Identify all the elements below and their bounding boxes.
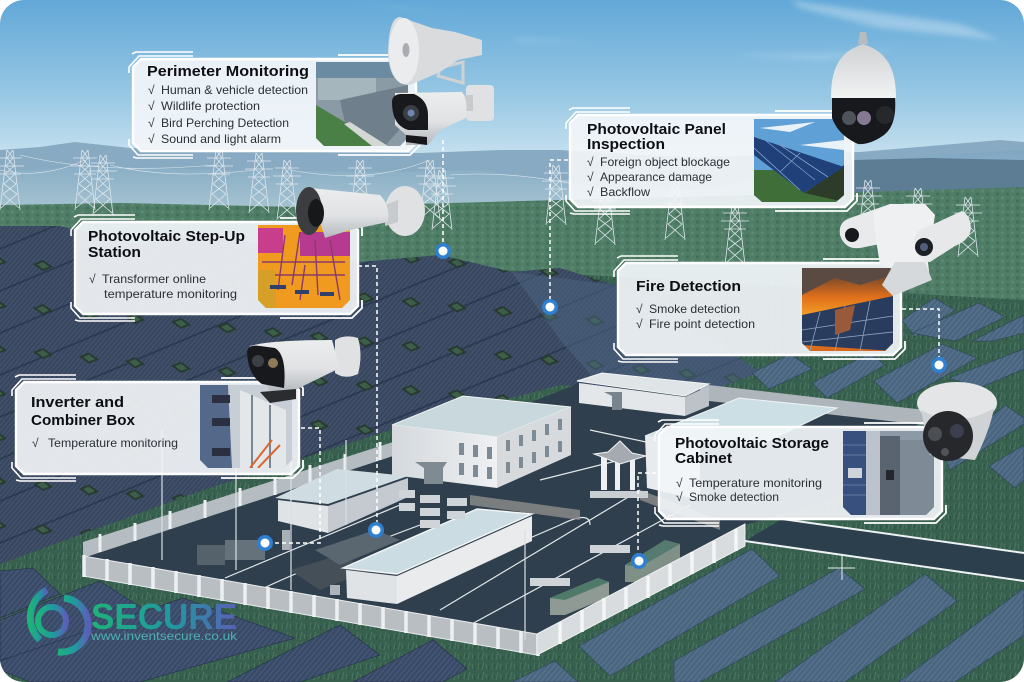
pavilion: [590, 441, 648, 498]
feature list: storage: √: [676, 490, 683, 504]
photo: inverter cabinets: [200, 385, 292, 468]
icon: horn speaker: [388, 17, 482, 85]
feature list: fire: √: [636, 317, 643, 331]
photo: burning solar panels: [802, 268, 893, 351]
sky: [0, 0, 1024, 153]
feature list: storage: Temperature monitoring: [689, 476, 822, 490]
feature list: perimeter: Bird Perching Detection: [161, 116, 289, 130]
heading: step-up station: Photovoltaic Step-Up: [88, 228, 245, 245]
front fence wall right: [537, 524, 745, 655]
front fence posts: [84, 555, 538, 656]
long building: [343, 509, 532, 604]
feature list: step-up: [89, 272, 237, 301]
feature list: panel inspection: Foreign object blockage: [600, 155, 730, 169]
panel: photovoltaic panel inspection: [566, 108, 857, 214]
panel: photovoltaic storage cabinet: [655, 420, 946, 526]
feature list: perimeter: √: [148, 116, 155, 130]
transformer equipment: [197, 530, 400, 595]
feature list: panel inspection: Backflow: [600, 185, 650, 199]
solar field left: [0, 226, 760, 564]
storage building: [645, 398, 837, 500]
fence inner: [470, 490, 720, 530]
substation compound: [83, 373, 925, 656]
solar panels right and bottom: [512, 298, 1024, 682]
battery containers: [550, 540, 680, 615]
heading: storage cabinet: [675, 435, 829, 467]
heading: storage cabinet: Photovoltaic Storage: [675, 435, 829, 452]
feature list: perimeter: √: [148, 99, 155, 113]
panel: perimeter monitoring: [129, 52, 420, 158]
step-up building: [275, 469, 408, 533]
panel: photovoltaic step-up station: [71, 215, 362, 321]
clouds: [518, 0, 995, 62]
feature list: panel inspection: √: [587, 155, 594, 169]
heading: fire detection: Fire Detection: [636, 278, 741, 295]
photo: thermal image: [258, 225, 350, 308]
feature list: inverter: √: [32, 436, 39, 450]
feature list: perimeter: Human & vehicle detection: [161, 83, 308, 97]
icon: bullet camera perimeter: [392, 85, 494, 145]
heading: panel inspection: Inspection: [587, 136, 665, 153]
road markings: [225, 430, 690, 625]
icon: dual PTZ camera: [840, 204, 971, 296]
connector: perimeter: [435, 140, 451, 259]
icon: inverter bullet camera: [247, 336, 360, 403]
logo mark: [30, 590, 88, 652]
asphalt ground: [83, 385, 925, 638]
feature list: panel inspection: [587, 155, 730, 199]
photo: plant aerial view: [316, 62, 408, 146]
heading: inverter: [31, 394, 136, 429]
power towers: [0, 150, 982, 265]
insulators: [399, 490, 630, 586]
heading: perimeter monitoring: Perimeter Monitoring: [147, 63, 309, 80]
feature list: storage: √: [676, 476, 683, 490]
feature list: step-up: Transformer online: [102, 272, 206, 286]
logo: secure: [30, 590, 238, 652]
back walls: [83, 442, 393, 558]
heading: inverter: Combiner Box: [31, 412, 136, 429]
heading: step-up station: [88, 228, 245, 261]
feature list: perimeter: √: [148, 132, 155, 146]
logo url: www.inventsecure.co.uk: [90, 629, 238, 643]
feature list: perimeter: Sound and light alarm: [161, 132, 281, 146]
panel: fire detection: [614, 256, 905, 362]
connector: storage cabinet: [631, 473, 656, 569]
road: [745, 519, 1024, 581]
connector: step-up station: [358, 266, 384, 538]
feature list: panel inspection: √: [587, 185, 594, 199]
forest hillside: [0, 187, 1024, 310]
feature list: panel inspection: √: [587, 170, 594, 184]
feature list: storage: Smoke detection: [689, 490, 779, 504]
feature list: fire: Fire point detection: [649, 317, 755, 331]
photo: storage cabinets: [843, 431, 934, 515]
front fence wall left: [83, 556, 537, 655]
feature list: step-up: temperature monitoring: [104, 287, 237, 301]
back small building: [577, 373, 709, 416]
photo: solar panel: [754, 119, 844, 202]
feature list: step-up: √: [89, 272, 96, 286]
feature list: inverter: Temperature monitoring: [48, 436, 178, 450]
feature list: fire: √: [636, 302, 643, 316]
feature list: fire: [636, 302, 755, 331]
icon: PTZ dome camera: [831, 32, 896, 144]
solar panels lower left: [0, 568, 467, 682]
lightning rods: [162, 430, 525, 640]
icon: turret camera: [917, 382, 997, 461]
connector: inverter: [257, 428, 320, 551]
heading: panel inspection: [587, 121, 726, 153]
feature list: perimeter: Wildlife protection: [161, 99, 260, 113]
icon: thermal bullet camera: [296, 186, 425, 238]
heading: storage cabinet: Cabinet: [675, 450, 732, 467]
near mountains: [0, 150, 1024, 207]
connector: fire detection: [902, 309, 947, 373]
main office building: [392, 396, 571, 488]
connector: panel inspection: [542, 160, 568, 315]
far mountains: [0, 140, 1024, 190]
feature list: perimeter: √: [148, 83, 155, 97]
feature list: panel inspection: Appearance damage: [600, 170, 712, 184]
heading: inverter: Inverter and: [31, 394, 124, 411]
logo wordmark: SECURE: [91, 596, 237, 637]
heading: step-up station: Station: [88, 244, 141, 261]
feature list: storage: [676, 476, 822, 504]
feature list: fire: Smoke detection: [649, 302, 740, 316]
feature list: perimeter: [148, 83, 308, 146]
panel: inverter and combiner box: [12, 375, 303, 481]
ground grass: [0, 240, 1024, 682]
heading: panel inspection: Photovoltaic Panel: [587, 121, 726, 138]
